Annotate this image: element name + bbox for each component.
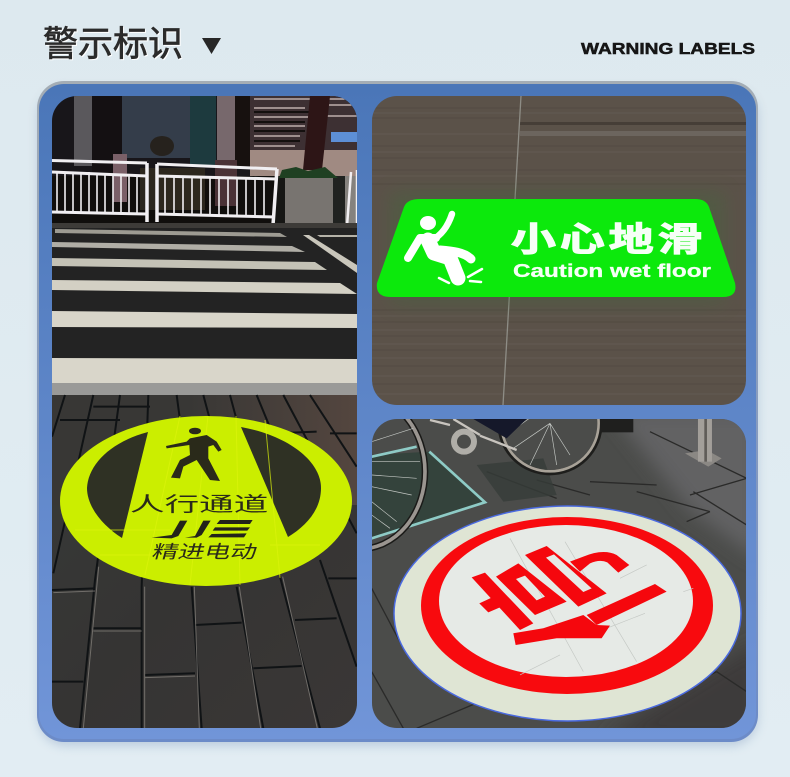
wood wall background [372, 96, 746, 405]
asphalt road [52, 228, 357, 359]
white light circle [394, 506, 741, 721]
logo mark [152, 520, 253, 538]
paving joints [372, 432, 747, 728]
bicycle wheels [372, 419, 602, 551]
panel: wet floor sign photo [372, 96, 746, 405]
brand text: 精进电动 [150, 541, 260, 562]
red ring [421, 517, 713, 694]
sign text: pedestrian passage: 人行通道 [130, 493, 268, 515]
metal post [685, 419, 722, 467]
panel: crosswalk photo with pedestrian projection [52, 96, 357, 728]
title: 警示标识 [43, 25, 183, 64]
icon: down triangle [202, 38, 221, 54]
brick pavement [52, 395, 357, 728]
planter [275, 167, 357, 224]
tile seams [75, 416, 320, 585]
street scene background [52, 96, 357, 226]
tile joints on light [510, 538, 693, 675]
green sign [377, 199, 736, 297]
paving background [372, 410, 760, 740]
bicycle chainring [430, 419, 527, 452]
drain frame [372, 447, 485, 538]
zebra stripes [52, 229, 357, 395]
panel: blue frame [37, 81, 758, 746]
sign text: English: Caution wet floor [513, 260, 711, 281]
panel: red logo projection photo [372, 419, 746, 728]
darker shade under bicycles [372, 452, 485, 538]
red logo symbol [472, 546, 667, 645]
yellow pedestrian projection [60, 416, 352, 586]
white railings [52, 160, 357, 226]
icon: walking pedestrian [166, 428, 222, 481]
icon: slipping figure [408, 214, 482, 283]
subtitle: warning labels: WARNING LABELS [581, 41, 755, 58]
sign text: Chinese: 小心地滑 [511, 221, 706, 259]
title: 警示标识 [44, 26, 184, 65]
dark side segments [87, 427, 321, 538]
